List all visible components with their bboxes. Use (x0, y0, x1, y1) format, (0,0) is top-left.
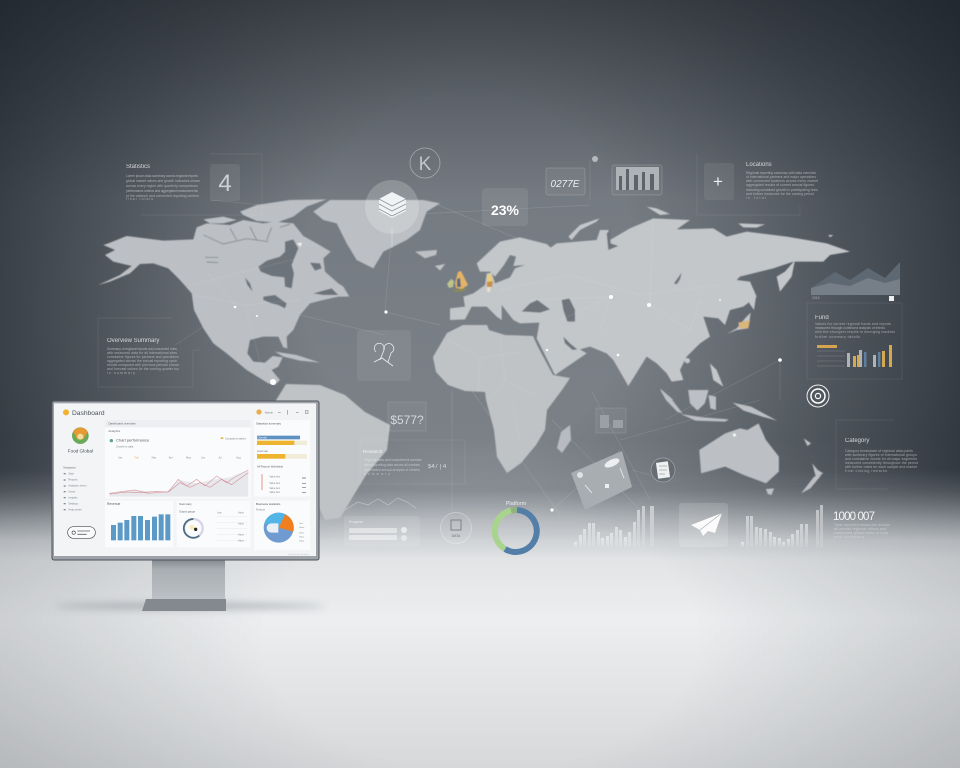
card: right progress list: All Reports Worldwide (257, 464, 284, 468)
sidebar: Help center (68, 507, 82, 511)
panel: fund with bars: Values for current regional funds and reports (815, 322, 891, 326)
panel: top right text with icon: Regional reporting summary with data overview (746, 171, 817, 175)
area chart: right: 2018 (812, 296, 820, 300)
icon: concentric target (807, 385, 829, 407)
card: line chart: Mar (152, 456, 156, 460)
panel: top right text with icon: aggregated results of current annual figures (746, 183, 814, 187)
panel: top right text with icon: + (713, 172, 723, 191)
panel: top right text with icon (697, 154, 818, 215)
monitor stand (142, 559, 226, 611)
panel: lower center text: Regional notes and measurement overview (364, 458, 423, 462)
card: right progress list: Value item (269, 487, 280, 490)
icon card: paper plane (679, 503, 728, 547)
card: gauge table: Value (238, 512, 244, 514)
icon: circled K: K (419, 154, 432, 175)
Eurasia (450, 207, 850, 400)
card: pie chart: Value (299, 536, 305, 538)
panel: left text: results compared with previous periods shown (107, 363, 179, 367)
city glow points (234, 156, 782, 512)
card: line chart (105, 420, 251, 498)
icon: circled K (410, 148, 440, 178)
card: blue bars: Revenue (107, 502, 120, 506)
stat card: percentage: 23% (491, 202, 520, 218)
card: line chart: Dashboard overview (108, 422, 136, 426)
panel: top right text with icon: of international partners and major operations (746, 175, 816, 179)
panel: top right text with icon: and further measures for the coming period (746, 192, 814, 196)
monitor frame (52, 401, 319, 560)
card: gauge table: Item (217, 511, 222, 514)
sidebar: Analytics menu (68, 484, 87, 488)
stat: large number with caption: and summary (834, 535, 864, 539)
panel: left text: in summary (107, 371, 135, 375)
panel: faint progress bars (344, 516, 420, 546)
card: gauge table: Summary (179, 502, 192, 506)
line chart: faint (345, 498, 416, 510)
panel: left text: Overview Summary (107, 338, 159, 344)
stat card: code number (546, 168, 585, 195)
monitor screen (54, 403, 316, 556)
card: pie chart: Value (299, 532, 305, 534)
donut chart (495, 501, 537, 552)
icon card: route sketch (357, 330, 411, 381)
stat: large number with caption: connected global hubs in total (834, 531, 888, 535)
card: line chart: Analytics (108, 429, 121, 433)
icon: note in circle (651, 458, 675, 482)
panel: top left text with number: Statistics (126, 164, 150, 170)
card: pie chart: Value (299, 527, 305, 529)
network lines (175, 160, 780, 515)
Greenland highlight circle with stack icon (365, 180, 419, 248)
sidebar: Users (68, 489, 76, 493)
small images card (596, 408, 626, 433)
card: gauge table: Value (238, 524, 244, 526)
card: line chart: May (186, 456, 192, 460)
area chart: right (811, 262, 900, 301)
panel: category text (836, 420, 918, 489)
monitor (52, 401, 325, 611)
panel: top left text with number: of the network and connected reporting centers (126, 194, 199, 198)
panel: lower center text: with supporting data across all markets (364, 463, 420, 467)
icon: faint circle emblem: DATA (452, 534, 461, 538)
card: pie chart: Value (299, 541, 305, 543)
card: right progress list: Value item (269, 476, 280, 479)
world map (98, 199, 850, 520)
Madagascar (557, 425, 571, 453)
panel: top left text with number: 4 (218, 170, 232, 197)
card: line chart: Growth in data (116, 445, 134, 449)
panel: category text: measured consistently throughout the period (845, 461, 918, 465)
Iceland, Britain and Denmark highlights (431, 250, 493, 292)
card: line chart: Jan (118, 456, 123, 460)
card: pie chart: Products (256, 509, 266, 512)
panel: top left text with number: final totals (126, 197, 153, 201)
panel: fund with bars: further summary details (815, 335, 860, 339)
panel: category text: Category (845, 438, 869, 444)
app header: Admin (265, 410, 273, 414)
panel: category text: with further notes for each sample and market (845, 465, 917, 469)
panel: left text: cumulative figures for partners and operations (107, 355, 179, 359)
North America and Greenland (98, 199, 445, 385)
card: pie chart (254, 501, 310, 550)
sidebar: Insights (68, 495, 78, 499)
card: line chart: Compared values (225, 436, 246, 440)
stat card: dollar value: $577? (390, 413, 424, 427)
bar chart: faint center (574, 506, 654, 547)
monitor screen: Updated recently today (288, 553, 309, 556)
sidebar: Start (68, 471, 74, 475)
panel: category text: final closing remarks (845, 469, 887, 473)
panel: fund with bars: with the strongest results in emerging markets (815, 330, 895, 334)
monitor shadow (55, 604, 325, 608)
panel: left text: with measured data for all international sites (107, 351, 177, 355)
panel: fund with bars: Fund (815, 315, 829, 321)
panel: top right text with icon: with connected locations across every market (746, 179, 818, 183)
panel: fund with bars (807, 303, 902, 379)
panel: left text: Summary of regional reports and connected hubs (107, 347, 177, 351)
panel: category text: and cumulative counts for all major segments (845, 457, 917, 461)
panel: top left text with number: across every region with quarterly comparisons (126, 184, 198, 188)
panel: category text: Category breakdown of regional data points (845, 449, 913, 453)
card: gauge table (177, 501, 251, 547)
card: line chart: Aug (236, 456, 241, 460)
panel: top right text with icon: in total (746, 196, 766, 200)
panel: left text: and forecast values for the coming quarter too (107, 367, 179, 371)
card: blue bars (105, 501, 173, 547)
panel: lower center text: Research (363, 449, 383, 454)
sidebar: Navigation (63, 465, 76, 469)
card: right progress list (254, 420, 310, 497)
card: gauge table: Value (238, 534, 244, 536)
panel: top right text with icon: including sustained growth in participating hubs (746, 188, 818, 192)
panel: top left text with number: global market values and growth indicators shown (126, 179, 200, 183)
card: gauge table: Output gauge (179, 510, 196, 514)
panel: lower center text: $47 | 4 (428, 464, 447, 470)
panel: top left text with number: Lorem ipsum data summary across regional reports (126, 174, 198, 178)
card: right progress list: Statistics summary (256, 422, 282, 426)
country borders (190, 218, 720, 440)
card: line chart: Apr (169, 456, 173, 460)
card: right progress list: Value item (269, 482, 280, 485)
panel: lower center text (360, 440, 465, 484)
icon: faint circle emblem (440, 512, 472, 544)
card: right progress list: Goal rate (257, 449, 268, 453)
panel: lower center text: and related annual analysis of centers (364, 468, 420, 472)
South America (270, 384, 390, 520)
panel: top left text with number: performance metrics and aggregated measurements (126, 189, 198, 193)
stat: large number with caption: 1000 007 (833, 511, 875, 523)
bar chart card: top center (612, 165, 662, 195)
Africa (433, 325, 570, 473)
stat: large number with caption: all current regional offices and (834, 527, 886, 531)
stat card: percentage (482, 188, 528, 226)
sidebar (63, 427, 95, 538)
sidebar: Reports (68, 478, 78, 482)
panel: left text (98, 318, 200, 387)
app header (63, 409, 308, 417)
stat: large number with caption: Total reported measures across (834, 523, 890, 527)
panel: top right text with icon: Locations (746, 162, 772, 168)
panel: faint progress bars: Progress (349, 520, 363, 524)
stat: large number with caption (833, 511, 890, 539)
card: pie chart: Text (299, 522, 303, 525)
card: line chart: Feb (134, 456, 139, 460)
card: gauge table: Value (238, 540, 244, 542)
map card: tilted image (571, 451, 632, 510)
stat card: code number: 0277E (551, 179, 580, 190)
panel: category text: with summary figures of international groups (845, 453, 917, 457)
card: pie chart: Business statistics (256, 502, 281, 506)
sidebar: Settings (68, 501, 79, 505)
panel: left text: aggregated across the annual reporting cycle (107, 359, 177, 363)
panel: fund with bars: measured through continued analysis of trends (815, 326, 885, 330)
card: line chart: Jun (201, 456, 206, 460)
card: right progress list: Value item (269, 491, 280, 494)
card: line chart: Chart performance (116, 438, 150, 443)
stat card: dollar value (388, 402, 426, 431)
Indonesia and Oceania (660, 390, 823, 495)
app header: Dashboard (72, 410, 105, 417)
donut chart: Platform (506, 501, 527, 507)
sidebar: Food Global (68, 449, 93, 454)
card: right progress list: Overall (257, 436, 267, 440)
card: line chart: Jul (218, 456, 222, 460)
panel: lower center text: summary (364, 472, 390, 476)
panel: top left text with number (126, 154, 262, 215)
bar chart: faint right (741, 505, 823, 547)
